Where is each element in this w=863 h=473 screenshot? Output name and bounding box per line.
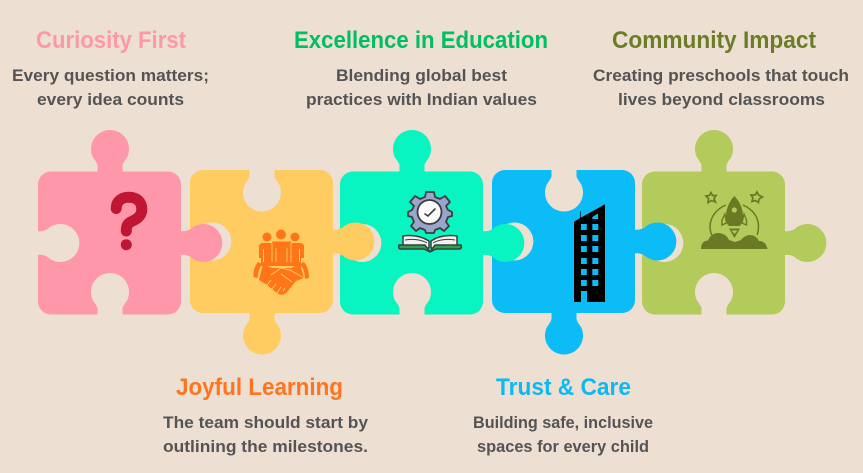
heading: Curiosity First: Curiosity First	[36, 27, 186, 54]
text block: Joyful Learning description: The team should start by	[163, 414, 369, 432]
icon: team and handshake	[253, 230, 309, 295]
text block: Trust and Care description	[473, 414, 653, 456]
icon: question mark	[116, 197, 142, 250]
text block: Community Impact description	[593, 67, 849, 109]
text block: Curiosity First description	[12, 67, 209, 109]
panel: Excellence in Education text	[294, 27, 548, 109]
gear	[408, 192, 452, 233]
panel: Curiosity First text	[12, 27, 209, 109]
puzzle piece: green, Community Impact	[642, 130, 826, 314]
text block: Excellence in Education description	[306, 67, 537, 109]
open book	[399, 236, 461, 252]
text block: Curiosity First description: every idea counts	[37, 91, 184, 109]
heading: Community Impact: Community Impact	[612, 27, 816, 54]
text block: Curiosity First description: Every question matters;	[12, 67, 209, 85]
panel: Community Impact text	[593, 27, 849, 109]
puzzle piece: pink, Curiosity First	[38, 130, 222, 314]
text block: Community Impact description: lives beyond classrooms	[618, 91, 825, 109]
text block: Trust and Care description: Building safe, inclusive	[473, 414, 653, 432]
puzzle piece: teal, Excellence in Education	[340, 130, 524, 314]
text block: Excellence in Education description: Blending global best	[336, 67, 508, 85]
heading: Excellence in Education: Excellence in Education	[294, 27, 548, 54]
panel: Joyful Learning text	[163, 374, 369, 456]
icon: gear and open book	[399, 192, 461, 252]
text block: Community Impact description: Creating preschools that touch	[593, 67, 849, 85]
icon: rocket launch	[701, 192, 768, 249]
text block: Trust and Care description: spaces for every child	[477, 438, 649, 456]
heading: Trust and Care: Trust & Care	[496, 374, 631, 401]
heading: Joyful Learning: Joyful Learning	[176, 374, 343, 401]
panel: Trust and Care text	[473, 374, 653, 456]
puzzle piece: yellow, Joyful Learning	[190, 170, 374, 354]
text block: Excellence in Education description: practices with Indian values	[306, 91, 537, 109]
icon: office building	[574, 204, 605, 302]
text block: Joyful Learning description: outlining the milestones.	[163, 438, 368, 456]
puzzle piece: blue, Trust and Care	[492, 170, 676, 354]
text block: Joyful Learning description	[163, 414, 369, 456]
